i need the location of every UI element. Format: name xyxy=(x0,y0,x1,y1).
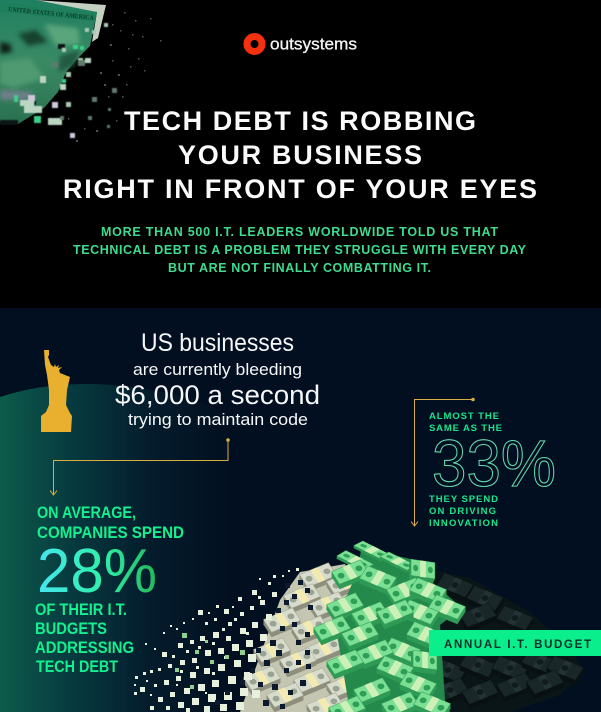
image: pile of money xyxy=(134,541,586,712)
text block: 28 percent: BUDGETS xyxy=(35,620,107,638)
background: navy lower panel xyxy=(0,308,601,712)
text block: US businesses: $6,000 a second xyxy=(115,380,320,410)
text block: US businesses: trying to maintain code xyxy=(128,410,308,429)
title: YOUR BUSINESS xyxy=(178,140,422,170)
text block: 28 percent: ADDRESSING xyxy=(35,639,134,657)
text block: 33 percent: INNOVATION xyxy=(429,518,498,529)
label: annual I.T. budget xyxy=(429,630,601,656)
text block: 28 percent: TECH DEBT xyxy=(36,658,118,676)
text block: US businesses: US businesses xyxy=(141,329,294,357)
title xyxy=(63,106,537,204)
text block: 28 percent: COMPANIES SPEND xyxy=(37,524,184,542)
subtitle: BUT ARE NOT FINALLY COMBATTING IT. xyxy=(168,261,431,275)
background: black header xyxy=(0,0,601,308)
text block: 28 percent: ON AVERAGE, xyxy=(37,504,136,522)
text block: 33 percent: ALMOST THE xyxy=(429,411,499,422)
icon: red ring xyxy=(247,36,262,52)
text block: 33 percent: ON DRIVING xyxy=(429,506,496,517)
text block: 28 percent: OF THEIR I.T. xyxy=(35,601,127,619)
bill lettering: UNITED STATES OF AMERICA xyxy=(8,6,94,22)
stat: 28%: 28% xyxy=(37,537,157,606)
text block: 33 percent: THEY SPEND xyxy=(429,494,498,505)
text block: 28 percent xyxy=(35,504,184,676)
text block: US businesses: are currently bleeding xyxy=(133,360,302,379)
pile: pixel scatter xyxy=(134,568,313,712)
pile: white fading section xyxy=(240,563,370,712)
text block: US businesses xyxy=(115,329,320,429)
label: annual I.T. budget: ANNUAL I.T. BUDGET xyxy=(444,639,591,651)
title: TECH DEBT IS ROBBING xyxy=(124,106,476,136)
icon: statue of liberty xyxy=(41,350,72,432)
subtitle xyxy=(73,225,527,275)
text block: 33 percent: SAME AS THE xyxy=(429,423,502,434)
logo: outsystems xyxy=(247,34,357,54)
arrow: 33 percent bracket xyxy=(411,398,474,526)
pile: dark fading section xyxy=(427,570,586,712)
pile: green section xyxy=(311,541,468,712)
logo wordmark: outsystems xyxy=(270,34,357,54)
image: disintegrating dollar bill xyxy=(0,0,162,142)
stat: 33%: 33% xyxy=(432,426,556,500)
text block: 33 percent xyxy=(429,411,556,529)
arrow: US businesses to average spend xyxy=(50,439,229,495)
title: RIGHT IN FRONT OF YOUR EYES xyxy=(63,174,537,204)
subtitle: MORE THAN 500 I.T. LEADERS WORLDWIDE TOLD US THAT xyxy=(101,225,498,239)
background: green hill xyxy=(0,384,230,712)
subtitle: TECHNICAL DEBT IS A PROBLEM THEY STRUGGLE WITH EVERY DAY xyxy=(73,243,527,257)
